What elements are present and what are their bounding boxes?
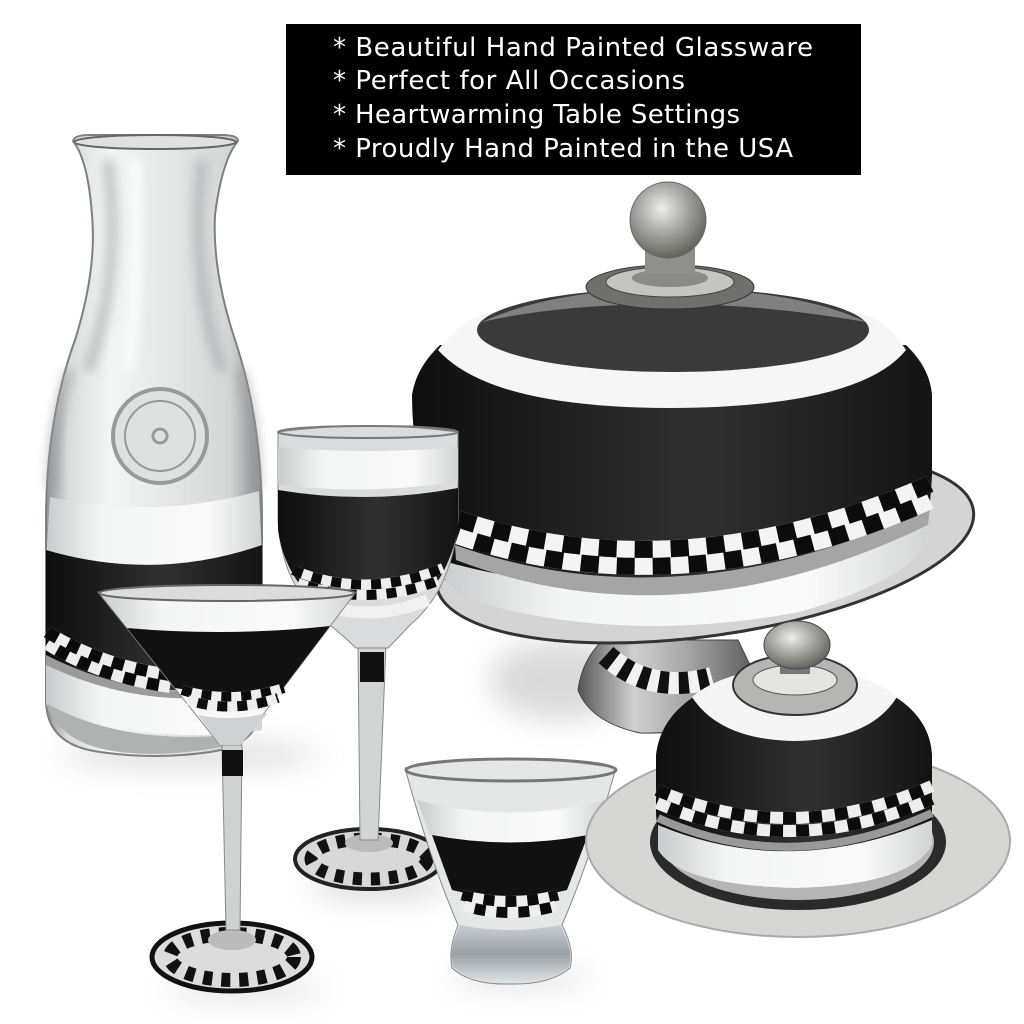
carafe checks [47,632,170,687]
dome lower white band [440,515,932,626]
butter dome [656,689,932,888]
stand plate [424,423,986,673]
soft shadows [60,640,630,998]
banner: feature list: * Perfect for All Occasions [333,66,685,96]
wine bowl [278,426,458,648]
dome white band [438,292,906,408]
wine stem [358,645,386,840]
carafe painted bands [46,491,262,575]
cake stand [412,182,986,733]
butter plate [586,745,1010,937]
stand pedestal [578,640,762,733]
butter knob [733,621,857,715]
stemless martini glass [405,759,616,984]
martini bowl [98,586,356,745]
martini glass [98,585,356,991]
martini stem [222,745,242,930]
dome body [412,345,932,608]
dome checks [458,484,930,566]
dome knob [586,182,754,309]
banner: feature list: * Heartwarming Table Settings [333,100,740,130]
martini base [152,923,312,991]
butter dish [586,621,1010,937]
dome top glass [477,288,869,372]
carafe [46,135,262,756]
wine glass [278,426,458,889]
banner: feature list [286,24,861,175]
banner: feature list: * Beautiful Hand Painted Glassware [333,33,813,63]
wine base [295,829,443,889]
carafe medallion [113,389,207,483]
banner: feature list: * Proudly Hand Painted in the USA [333,134,793,164]
